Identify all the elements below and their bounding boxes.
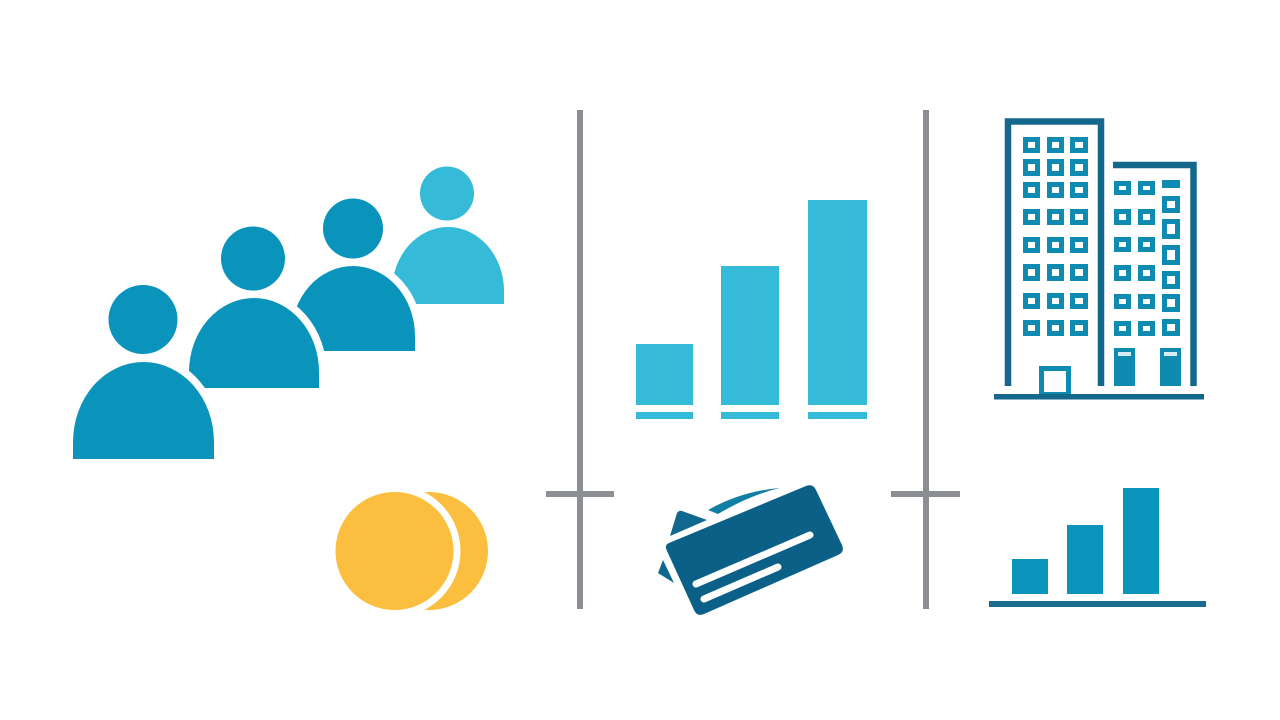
person 4 (light) [392,166,504,304]
front coin [336,492,454,610]
back card fragments [658,488,780,583]
tall building frame [1008,122,1101,386]
person 2 [189,226,319,388]
card lines [696,535,810,599]
entrance [1042,368,1068,394]
short building frame [1113,165,1194,386]
baseline [989,601,1206,607]
person 1 [73,285,214,459]
windows: tall building [1026,140,1086,334]
divider: left [546,110,614,609]
ground line [994,394,1204,400]
divider: right [891,110,960,609]
icon: group of people [73,166,504,459]
back coin [370,492,488,610]
front card [666,485,843,615]
bars [1012,488,1159,594]
window top strip [1162,180,1180,188]
icon: office buildings [994,122,1204,400]
icon: coins [336,492,488,610]
windows: short building [1116,184,1178,334]
door glass [1118,352,1177,356]
doors [1114,348,1181,386]
person 3 [291,198,415,351]
icon: credit cards [658,485,843,615]
bar chart: small bars [989,488,1206,607]
bar chart: large growth bars [636,200,867,419]
